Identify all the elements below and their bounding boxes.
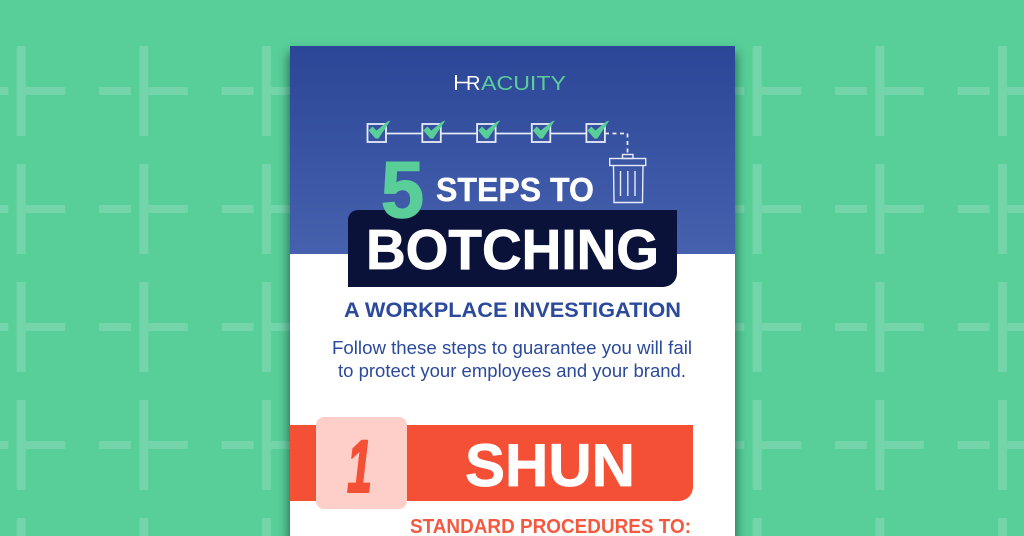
icon: checkbox 3 (477, 120, 500, 142)
panel: infographic page (290, 46, 735, 536)
icon: checkbox 4 (532, 120, 555, 142)
icon: trash can (610, 154, 646, 202)
logo: HR Acuity: R (466, 72, 480, 95)
step heading: SHUN: SHUN (465, 432, 635, 499)
logo: HR Acuity: ACUITY (481, 72, 566, 95)
logo: HR Acuity (455, 72, 566, 95)
step 1 banner (290, 417, 693, 509)
icon: checkbox 2 (422, 120, 445, 142)
step number 1: 1 (347, 425, 372, 508)
subtitle: A WORKPLACE INVESTIGATION: A WORKPLACE INVESTIGATION (344, 298, 681, 322)
icon: checklist chain leading to trash can (368, 120, 628, 153)
title banner: BOTCHING box (348, 210, 677, 287)
icon: checkbox 1 (368, 120, 390, 142)
number tile (316, 417, 407, 509)
icon: checkbox 5 (586, 120, 609, 142)
title number: 5: 5 (381, 145, 424, 234)
title: STEPS TO: STEPS TO (436, 171, 594, 208)
title: BOTCHING: BOTCHING (366, 218, 659, 282)
intro text: Follow these steps to guarantee you will fail (332, 337, 692, 358)
intro text: to protect your employees and your brand. (338, 360, 686, 381)
intro text (332, 337, 692, 381)
